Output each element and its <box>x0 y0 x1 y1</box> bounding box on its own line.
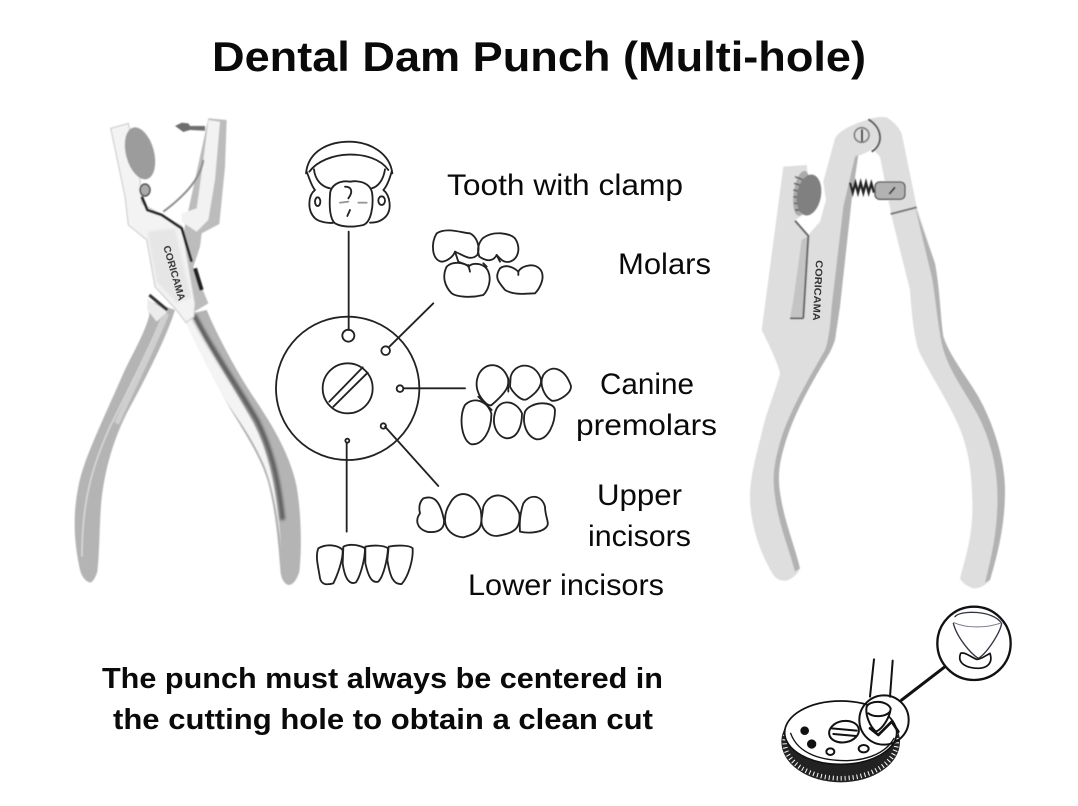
caption: the cutting hole to obtain a clean cut <box>113 704 653 736</box>
left plier logo: CORICAMA <box>160 244 187 302</box>
caption: The punch must always be centered in <box>102 663 663 695</box>
right plier right arm <box>867 117 1005 588</box>
title: Dental Dam Punch (Multi-hole) <box>212 33 866 80</box>
leader lines <box>347 232 465 532</box>
diagram: punch wheel with tooth groups <box>276 142 571 584</box>
punch pin and small loupe <box>859 659 909 745</box>
label: canine premolars: Canine <box>600 368 694 401</box>
label: canine premolars: premolars <box>576 409 717 442</box>
label: upper incisors: incisors <box>588 520 691 553</box>
left plier right jaw <box>183 118 227 313</box>
right plier left arm and jaw <box>750 120 882 581</box>
label: tooth with clamp: Tooth with clamp <box>447 169 683 202</box>
connector line <box>902 667 945 700</box>
icon: tooth with clamp <box>306 142 392 227</box>
icon: upper incisors <box>417 494 548 537</box>
label: upper incisors <box>588 479 691 553</box>
right plier slot <box>790 236 808 318</box>
label: molars: Molars <box>618 248 711 281</box>
icon: canine and premolars <box>462 365 571 444</box>
right plier disc <box>791 170 813 217</box>
illustration: right plier punch <box>750 117 1005 588</box>
wheel <box>781 701 900 782</box>
illustration: punch centered in cutting hole <box>781 607 1011 782</box>
right plier logo: CORICAMA <box>810 260 824 321</box>
caption <box>102 663 663 736</box>
label: upper incisors: Upper <box>597 479 682 512</box>
left plier body <box>111 123 195 323</box>
left plier disc <box>120 124 160 183</box>
label: canine premolars <box>576 368 717 442</box>
icon: molars <box>433 230 543 297</box>
right plier spring screw <box>850 183 874 193</box>
left plier handles <box>75 295 301 585</box>
illustration: left plier punch <box>75 118 301 585</box>
icon: cutting wheel <box>276 317 419 460</box>
label: lower incisors: Lower incisors <box>468 569 664 602</box>
left plier spring <box>163 160 203 212</box>
right plier pivot <box>854 128 869 142</box>
icon: lower incisors <box>317 545 413 584</box>
left plier punch pin <box>175 123 205 132</box>
magnified punch detail <box>937 607 1011 680</box>
